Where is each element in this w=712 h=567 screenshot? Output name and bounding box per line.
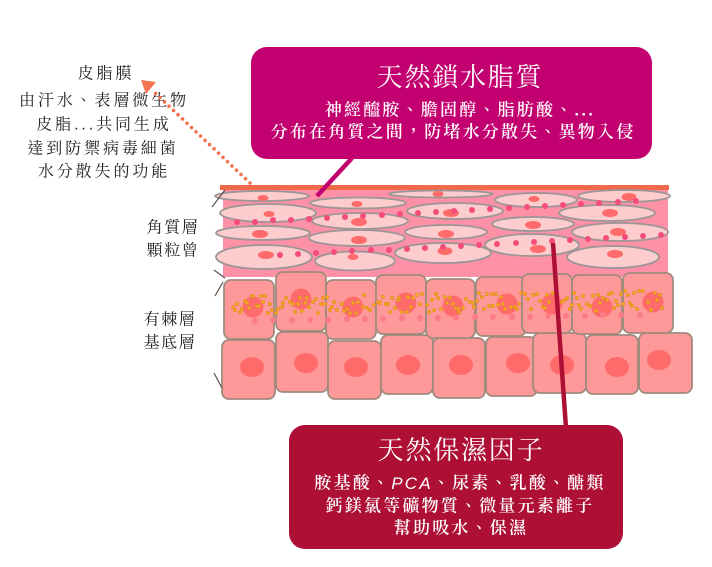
moisturizing heading: 天然保濕因子 [378,435,544,465]
layer labels: 角質層 [147,218,199,236]
panel: natural moisturizing factors [289,425,623,549]
layer labels: 基底層 [144,334,196,352]
pale dots in spinous layer [252,312,643,324]
corneocyte cells [215,190,670,270]
sebum film text: 皮脂膜 [78,64,134,82]
moisturizing description: 胺基酸、PCA、尿素、乳酸、醣類 [314,472,606,492]
layer labels: 有棘層 [144,310,196,328]
sebum film text [19,64,189,180]
layer labels [144,218,199,352]
sebum film text: 水分散失的功能 [38,162,170,180]
sebum film text: 達到防禦病毒細菌 [27,138,179,158]
lipid description: 分布在角質之間，防堵水分散失、異物入侵 [271,122,635,142]
moisturizing description: 鈣鎂氯等礦物質、微量元素離子 [326,496,594,516]
spinous layer cells [224,272,673,339]
stratum corneum pink layer [223,190,668,277]
lipid heading: 天然鎖水脂質 [377,62,543,92]
connector line: moisturizing factor [553,243,566,428]
dotted arrow to sebum film text [141,80,250,183]
lipid description: 神經醯胺、膽固醇、脂肪酸、... [325,100,595,120]
panel: natural lipids [251,47,652,159]
sebum film text: 由汗水、表層微生物 [19,90,189,110]
orange granules [231,289,664,315]
lipid description [271,100,635,142]
basal layer cells [222,332,692,399]
lipid dots [234,198,664,258]
layer boundary ticks [212,190,225,388]
skin surface film bar [220,185,669,190]
moisturizing description [314,472,606,538]
layer labels: 顆粒曾 [147,242,199,260]
sebum film text: 皮脂...共同生成 [36,116,172,134]
moisturizing description: 幫助吸水、保濕 [394,518,528,538]
connector line: lipid [317,158,352,196]
